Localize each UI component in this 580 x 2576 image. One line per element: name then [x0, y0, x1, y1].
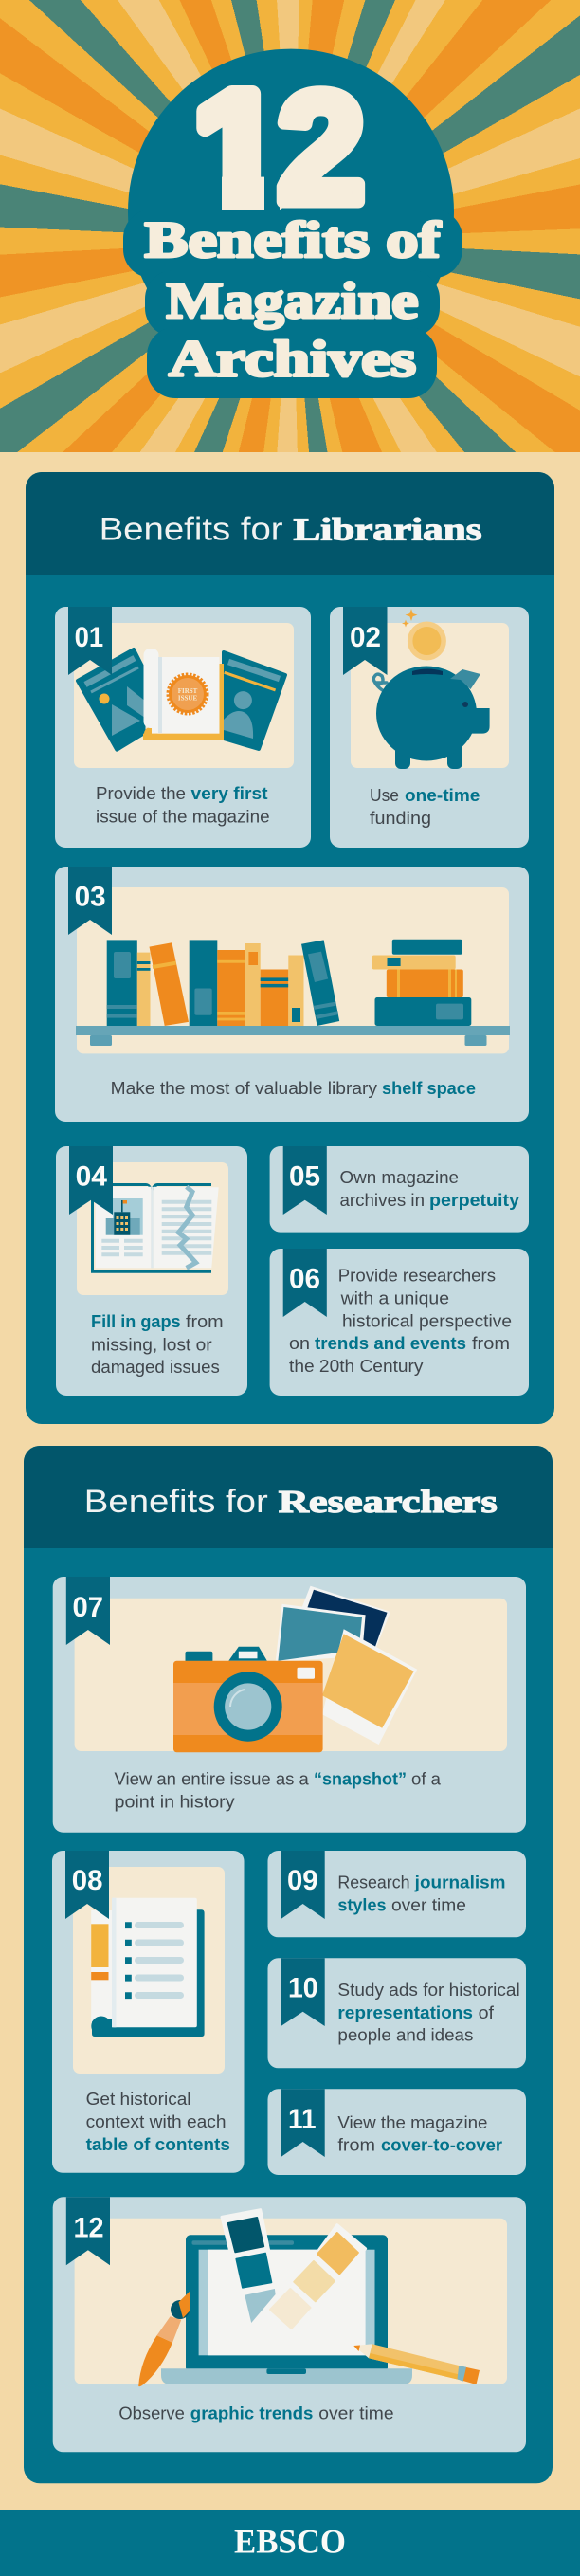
icon: camera and photos — [173, 1586, 417, 1752]
text 11: from — [337, 2136, 375, 2155]
text 10: Study ads for historical — [337, 1981, 520, 2000]
icon: magazines and first issue: ISSUE — [178, 694, 197, 702]
title line 2: Magazine — [167, 272, 419, 329]
heading: Benefits for Researchers — [84, 1484, 498, 1520]
text 02: one-time — [405, 786, 480, 805]
panel: Benefits for Librarians — [26, 472, 554, 1424]
text 04 — [91, 1312, 224, 1377]
title line 1: Benefits of — [144, 211, 442, 268]
card 02 — [330, 607, 529, 848]
ribbon 03 — [68, 867, 112, 935]
card 05 — [270, 1146, 529, 1233]
text 10: representations — [337, 2003, 473, 2022]
logo: EBSCO: EBSCO — [234, 2522, 346, 2560]
heading: Benefits for Researchers: Researchers — [279, 1485, 498, 1520]
text 06 — [289, 1266, 512, 1376]
text 06: from — [472, 1334, 510, 1353]
text 09: journalism — [414, 1873, 506, 1892]
card 09 — [267, 1851, 526, 1937]
card 04 — [56, 1146, 247, 1396]
text 03 — [111, 1079, 476, 1098]
text 06: trends and events — [315, 1334, 466, 1353]
heading: Benefits for Librarians: Benefits for — [100, 511, 283, 547]
text 03: Make the most of valuable library — [111, 1079, 377, 1098]
ribbon 05: 05 — [289, 1161, 320, 1193]
panel: Benefits for Researchers — [24, 1446, 553, 2483]
ribbon 01 — [68, 607, 112, 675]
ribbon 06: 06 — [289, 1264, 320, 1295]
ribbon 03: 03 — [75, 882, 106, 913]
ribbon 04: 04 — [76, 1161, 107, 1193]
text 03: shelf space — [382, 1079, 476, 1098]
text 01: Provide the — [96, 784, 186, 803]
ribbon 02: 02 — [350, 622, 381, 653]
text 12 — [118, 2404, 394, 2423]
text 01: very first — [191, 784, 268, 803]
icon: bookshelf — [76, 940, 510, 1046]
text 07: “snapshot” — [314, 1770, 407, 1789]
text 12: over time — [318, 2404, 394, 2423]
text 06: Provide researchers — [338, 1266, 496, 1285]
text 02 — [370, 786, 480, 828]
icon: table of contents booklet — [91, 1898, 205, 2037]
text 11 — [337, 2113, 502, 2155]
text 09: Research — [337, 1873, 409, 1892]
ribbon 08: 08 — [72, 1865, 102, 1896]
ribbon 09: 09 — [287, 1865, 318, 1896]
sunburst header background — [0, 0, 580, 452]
ribbon 11: 11 — [288, 2104, 317, 2135]
text 08 — [86, 2090, 230, 2154]
icon: magazines and first issue: FIRST — [178, 687, 198, 695]
card 12 — [53, 2197, 526, 2452]
ribbon 05 — [283, 1146, 327, 1215]
icon: magazines and first issue — [78, 649, 285, 750]
text 05: Own magazine — [339, 1168, 459, 1187]
card 11 — [267, 2089, 526, 2175]
card 07 — [53, 1577, 526, 1833]
text 08: table of contents — [86, 2135, 230, 2154]
text 07: point in history — [114, 1793, 235, 1812]
ribbon 07 — [66, 1577, 110, 1645]
ribbon 11 — [281, 2089, 325, 2157]
card 03 — [55, 867, 529, 1122]
ribbon 06 — [283, 1249, 327, 1317]
heading: Benefits for Researchers: Benefits for — [84, 1484, 268, 1520]
text 04: from — [186, 1312, 224, 1331]
icon: piggy bank and coin — [373, 609, 490, 769]
icon: laptop, swatches, brush and pencil — [138, 2210, 480, 2386]
card 01 — [55, 607, 311, 848]
text 06: with a unique — [340, 1288, 449, 1307]
text 10: of — [479, 2003, 495, 2022]
text 01: issue of the magazine — [96, 808, 270, 827]
footer bar — [0, 2510, 580, 2576]
text 07: View an entire issue as a — [114, 1770, 310, 1789]
text 12: Observe — [118, 2404, 185, 2423]
text 04: Fill in gaps — [91, 1312, 181, 1331]
text 06: on — [289, 1334, 310, 1353]
ribbon 09 — [281, 1851, 325, 1919]
ribbon 07: 07 — [72, 1592, 103, 1623]
text 07: of a — [411, 1770, 442, 1789]
heading: Benefits for Librarians — [100, 511, 481, 547]
ribbon 08 — [65, 1851, 109, 1919]
text 05 — [339, 1168, 519, 1210]
text 08: Get historical — [86, 2090, 191, 2109]
title number: 2 — [278, 61, 365, 235]
text 12: graphic trends — [190, 2404, 313, 2423]
ribbon 04 — [69, 1146, 113, 1215]
card 06 — [270, 1249, 529, 1396]
text 07 — [114, 1770, 442, 1812]
text 02: funding — [370, 809, 431, 828]
title line 3: Archives — [169, 330, 416, 387]
ribbon 12: 12 — [74, 2212, 104, 2243]
card 08 — [52, 1851, 245, 2173]
text 10: people and ideas — [337, 2026, 473, 2045]
text 06: the 20th Century — [289, 1357, 423, 1376]
ribbon 02 — [343, 607, 387, 675]
card 10 — [267, 1958, 526, 2068]
ribbon 12 — [66, 2197, 110, 2265]
text 11: cover-to-cover — [381, 2136, 502, 2155]
text 09: styles — [337, 1896, 387, 1915]
text 11: View the magazine — [337, 2113, 487, 2132]
text 08: context with each — [86, 2112, 226, 2131]
ribbon 10: 10 — [288, 1973, 318, 2004]
text 01 — [96, 784, 270, 827]
text 10 — [337, 1981, 520, 2045]
title number — [180, 61, 365, 235]
ribbon 01: 01 — [75, 622, 103, 653]
text 04: missing, lost or — [91, 1336, 212, 1355]
text 05: perpetuity — [429, 1191, 519, 1210]
title badge — [123, 49, 462, 398]
text 04: damaged issues — [91, 1358, 220, 1377]
text 05: archives in — [339, 1191, 425, 1210]
title number: 1 — [194, 61, 281, 235]
text 09 — [337, 1873, 506, 1915]
icon: damaged open magazine — [91, 1183, 219, 1273]
heading: Benefits for Librarians: Librarians — [294, 512, 481, 547]
text 09: over time — [391, 1896, 466, 1915]
text 02: Use — [370, 786, 399, 805]
text 06: historical perspective — [342, 1311, 512, 1330]
ribbon 10 — [281, 1958, 325, 2026]
